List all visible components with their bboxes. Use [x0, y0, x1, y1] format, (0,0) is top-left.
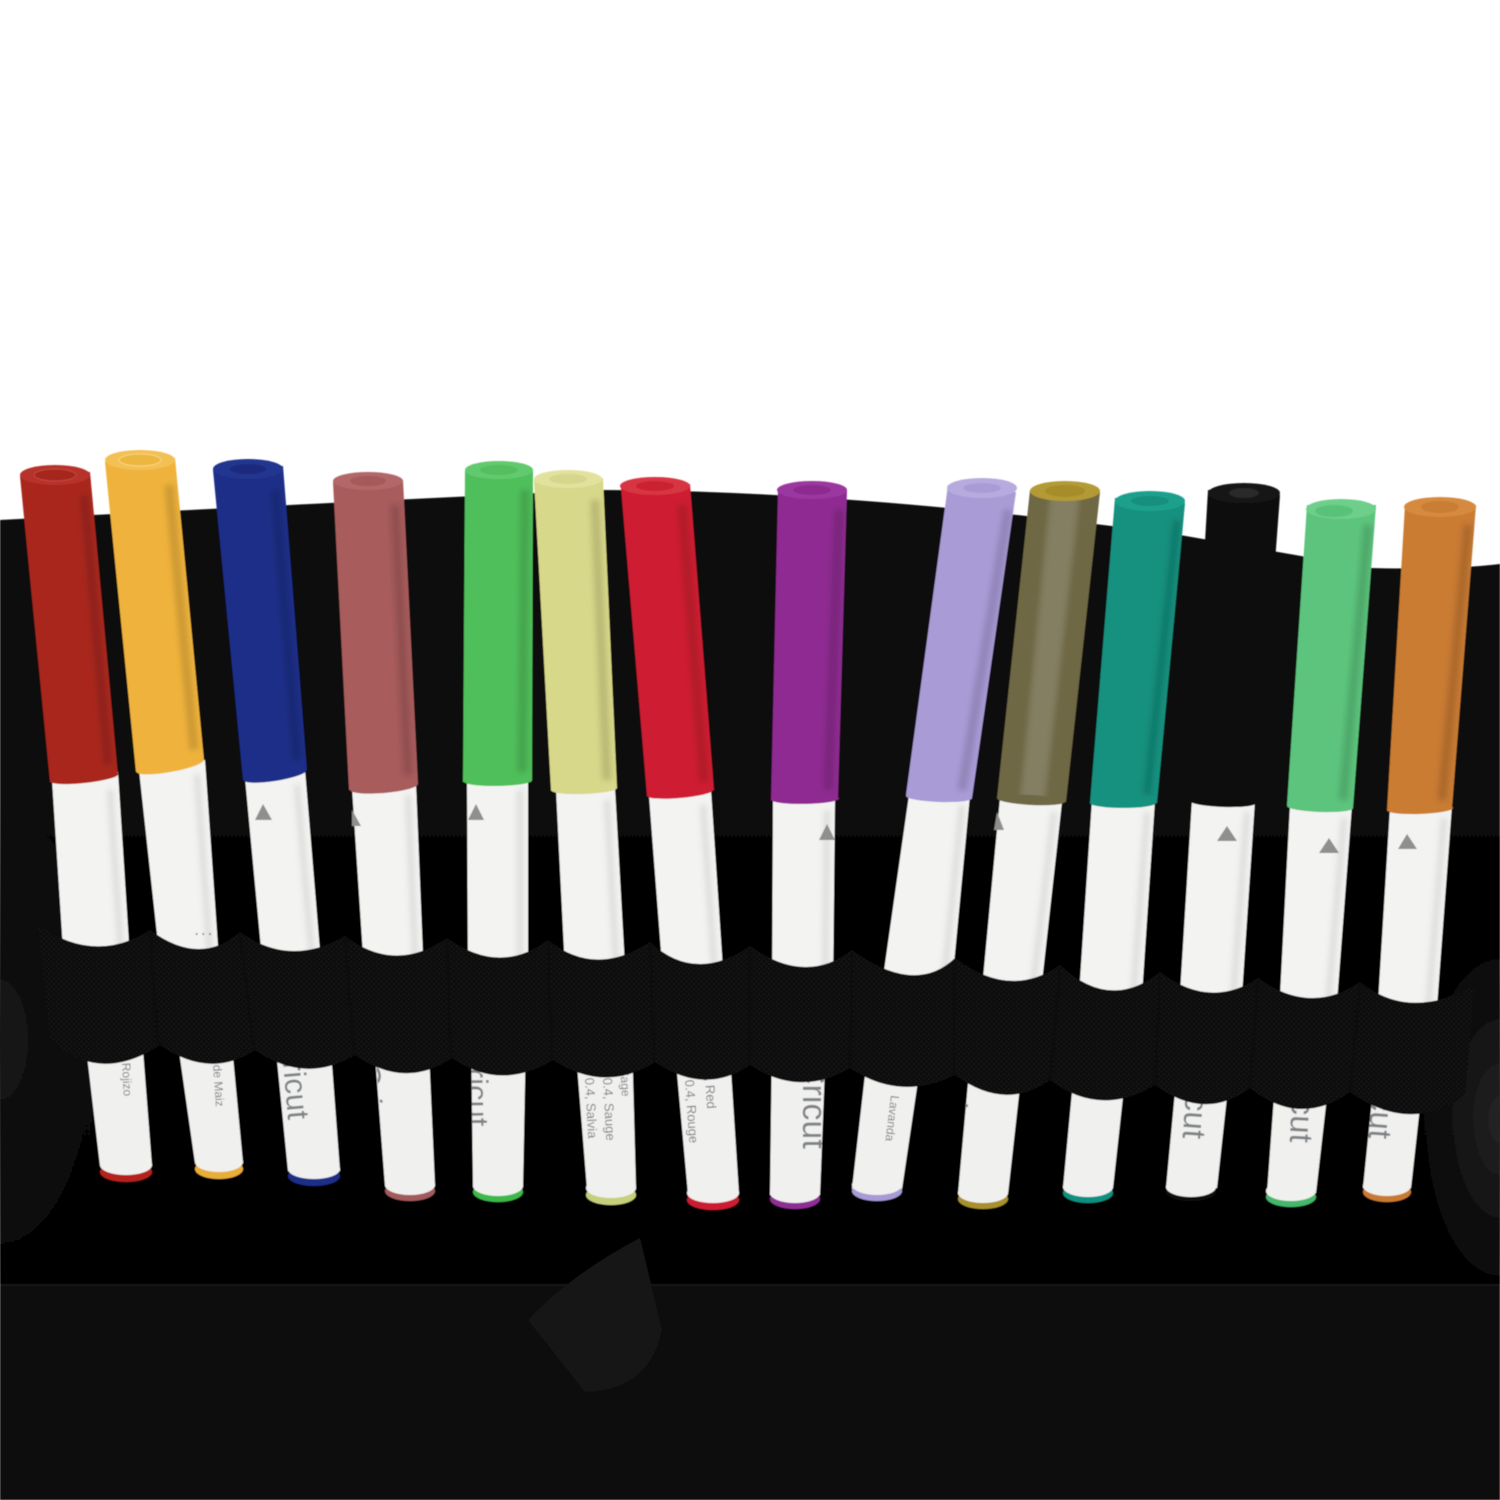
arrow mark — [819, 824, 835, 840]
pen 11: teal — [1063, 491, 1185, 1203]
pen 1: dark red — [20, 465, 152, 1182]
elastic pen band — [38, 925, 1475, 1114]
pen 4: dusty rose — [333, 472, 435, 1201]
arrow mark — [1217, 826, 1237, 841]
band pocket stitching — [150, 932, 1360, 1092]
brand text: ricut — [934, 1089, 974, 1150]
brand text: Cricut — [795, 1060, 833, 1149]
label: Lavanda — [882, 1095, 902, 1142]
pen 12: black — [1166, 483, 1280, 1201]
partial arrow mark — [994, 812, 1004, 830]
pen 6: sage: 0.4, Salvia — [582, 1077, 600, 1140]
label: Rojizo — [119, 1062, 135, 1097]
pen 5: green — [459, 461, 533, 1202]
pen 9: lavender — [852, 478, 1017, 1201]
partial arrow mark — [352, 810, 361, 826]
pen 10: metallic gold — [957, 480, 1101, 1210]
arrow mark — [468, 804, 484, 820]
labels: , Sage — [617, 1061, 633, 1097]
pen 2: yellow — [105, 450, 243, 1179]
dots: . . . — [195, 924, 212, 938]
arrow mark — [255, 804, 272, 820]
arrow mark — [1319, 838, 1339, 853]
labels: , Red — [702, 1077, 719, 1109]
arrow mark — [1398, 834, 1417, 849]
velcro strap on case — [528, 1238, 662, 1392]
pen 7: red: 0.4, Rouge — [682, 1079, 701, 1144]
brand text: ricut — [459, 1068, 495, 1127]
label: de Maiz — [210, 1064, 227, 1107]
brand text: ricut — [1176, 1076, 1217, 1140]
brand text: ricut — [276, 1060, 316, 1121]
pen 6: sage — [534, 470, 636, 1205]
black fabric case — [0, 490, 1500, 1500]
pen 3: navy — [213, 459, 340, 1186]
pen 7: red — [620, 477, 739, 1210]
pen 8: purple — [770, 481, 847, 1209]
brand text: Cricut — [351, 1061, 390, 1147]
pen 14: orange — [1362, 497, 1476, 1202]
brand text: ricut — [1283, 1080, 1323, 1144]
pen 13: mint — [1266, 499, 1376, 1207]
pen 6: sage: 0.4, Sauge — [600, 1077, 618, 1141]
brand text: ricut — [1362, 1076, 1403, 1140]
